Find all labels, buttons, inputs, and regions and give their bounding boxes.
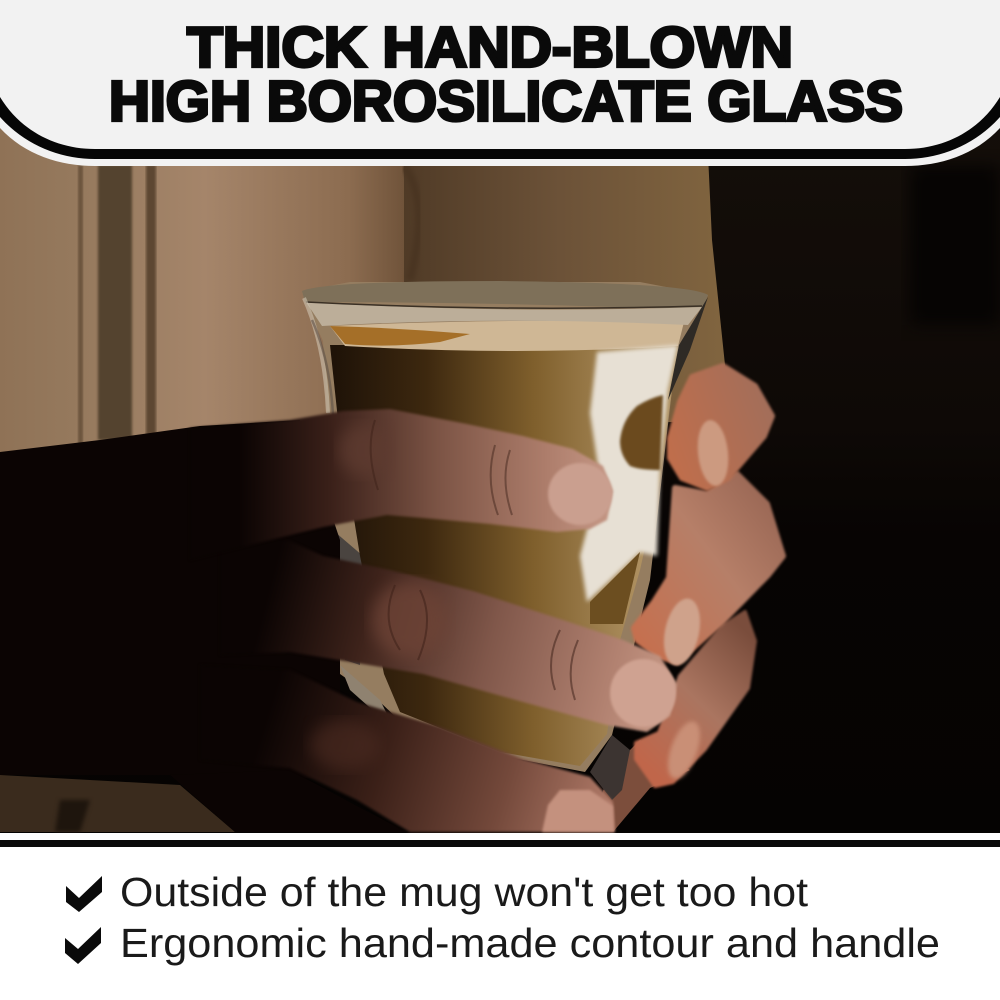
bullet text: Ergonomic hand-made contour and handle: [120, 920, 940, 966]
left hand shadow mass: [0, 420, 340, 780]
title text: THICK HAND-BLOWN: [187, 16, 793, 80]
rim: [302, 281, 708, 310]
index finger: [190, 409, 613, 560]
palm under fingers: [600, 740, 690, 832]
check icon 1: [66, 876, 102, 912]
photo: hands holding coffee glass: [0, 90, 1000, 835]
title text: HIGH BOROSILICATE GLASS: [109, 70, 903, 134]
bottom panel: [0, 833, 1000, 1000]
glass with coffee: [302, 281, 708, 772]
check icon 2: [65, 927, 101, 964]
highlight reflection: [580, 345, 678, 602]
lower finger: [200, 665, 615, 832]
title text: [109, 16, 903, 134]
first right finger: [670, 366, 772, 488]
lower fourth finger: [170, 770, 407, 832]
bullet text: Outside of the mug won't get too hot: [120, 869, 809, 915]
middle finger: [220, 528, 677, 732]
right hand area: [590, 366, 783, 832]
third right finger: [636, 612, 755, 786]
coffee: [330, 345, 678, 766]
second right finger: [634, 474, 783, 669]
sweater: [0, 90, 725, 832]
title banner: [0, 0, 1000, 166]
foam: [330, 321, 684, 351]
bullet text: [120, 869, 940, 966]
